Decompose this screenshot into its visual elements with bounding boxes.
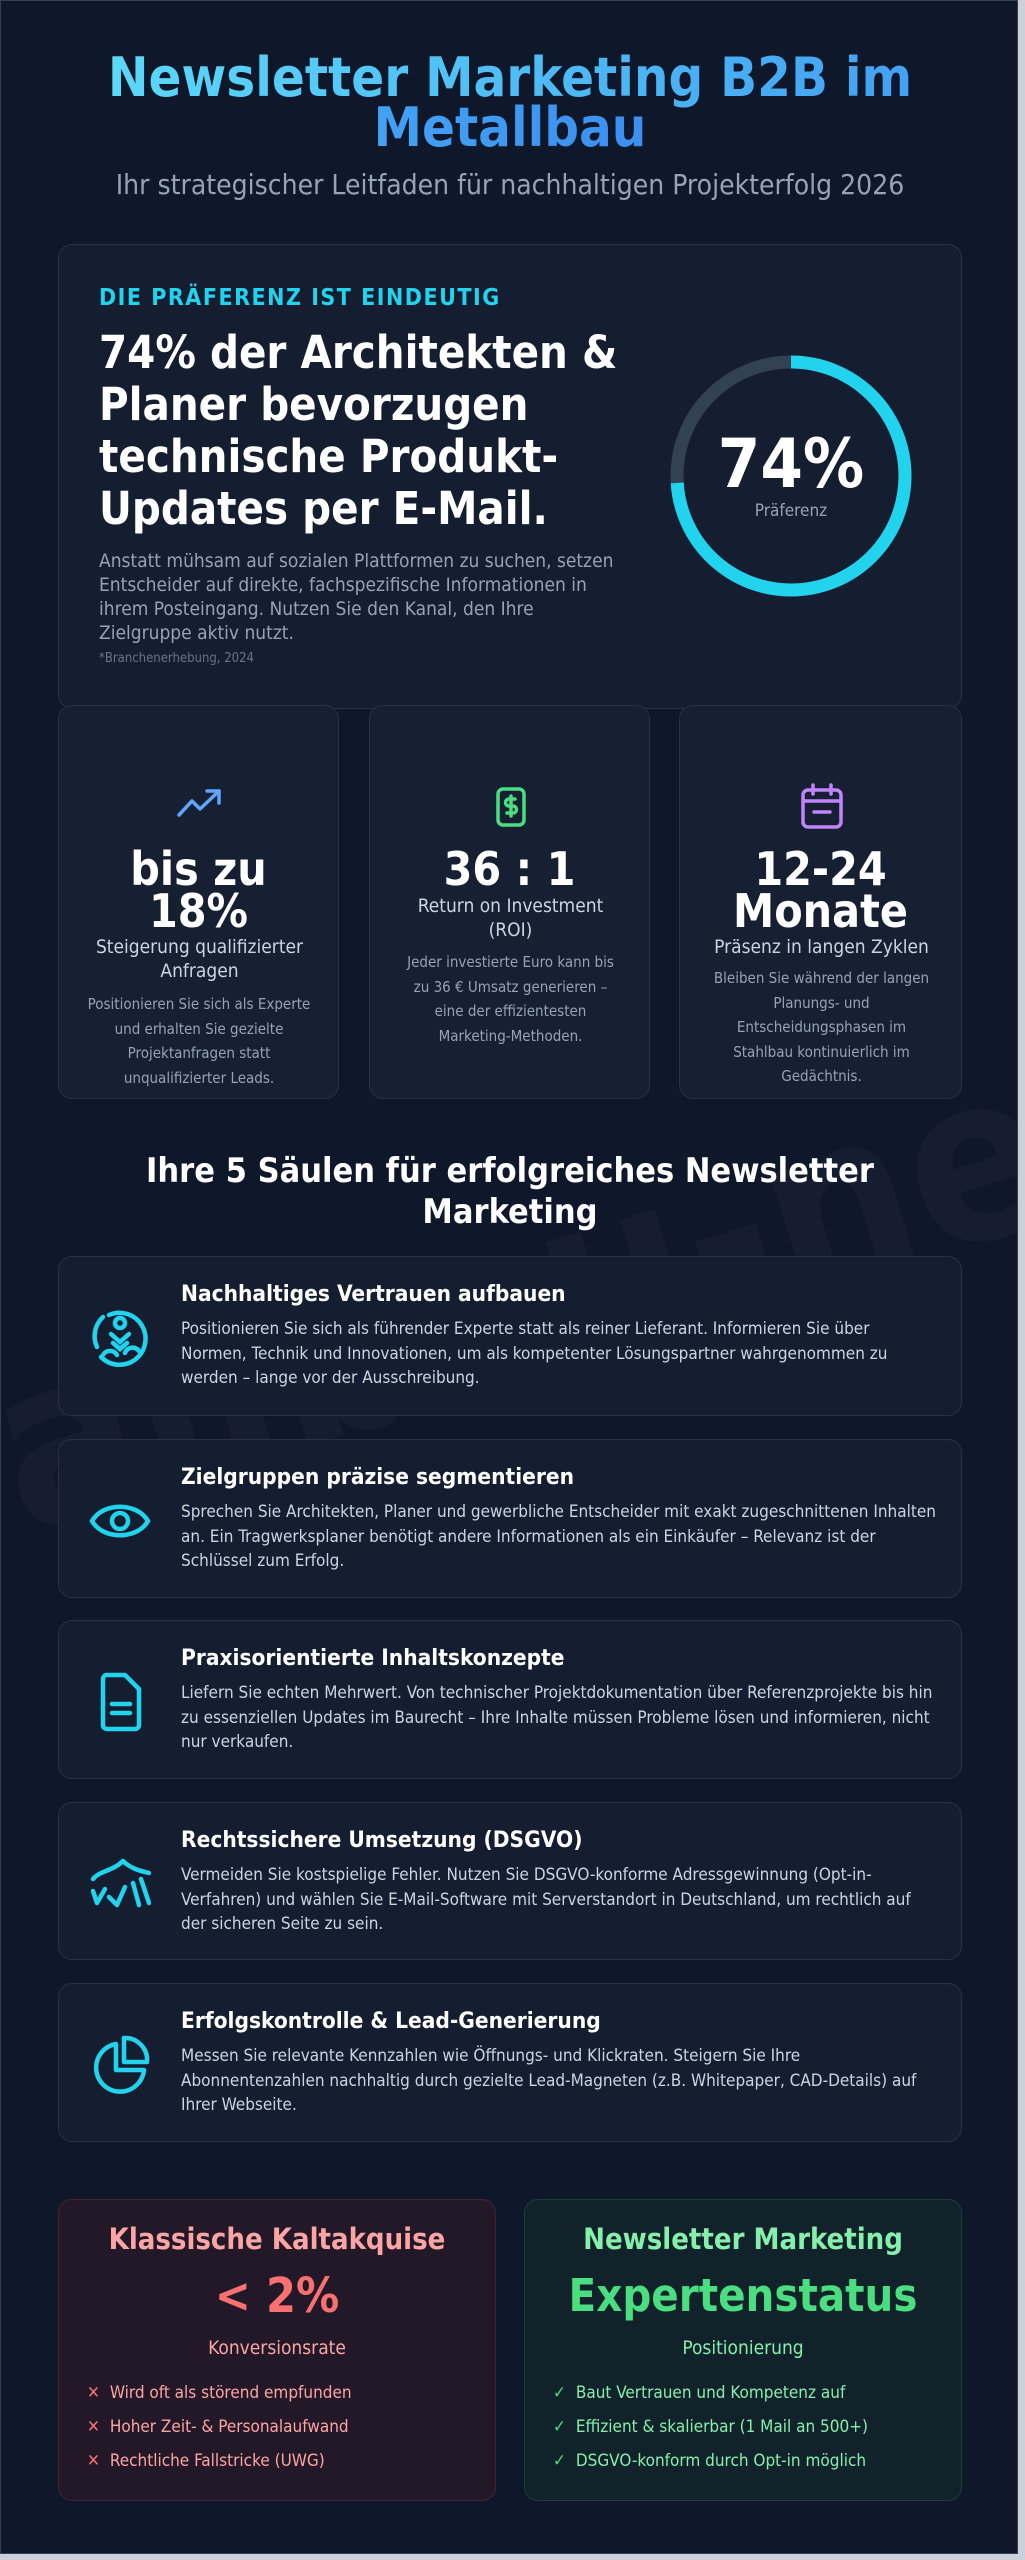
panel: stat ROI: Jeder investierte Euro kann bis zu 36 € Umsatz generieren – eine der effizientesten Marketing-Methoden. (407, 953, 614, 1044)
panel: pillar 1 (58, 1256, 962, 1416)
panel: pillar 2 (58, 1439, 962, 1598)
panel: stat 12-24 Monate: Bleiben Sie während der langen Planungs- und Entscheidungsphasen im Stahlbau kontinuierlich im Gedächtnis. (714, 969, 929, 1085)
panel: pillar 1: Positionieren Sie sich als führender Experte statt als reiner Lieferant. Informieren Sie über Normen, Technik und Innovationen, um als kompetenter Lösungspartner wahrgenommen zu werden – lange vor der Ausschreibung. (181, 1319, 888, 1388)
panel: stat 18%: Steigerung qualifizierter Anfragen (96, 936, 303, 982)
list: drawbacks: ✕ Wird oft als störend empfunden (87, 2383, 352, 2403)
panel: pillar 4: Rechtssichere Umsetzung (DSGVO) (181, 1827, 582, 1853)
subtitle: Ihr strategischer Leitfaden für nachhaltigen Projekterfolg 2026 (116, 168, 904, 201)
panel: pillar 4: Vermeiden Sie kostspielige Fehler. Nutzen Sie DSGVO-konforme Adressgewinnung (Opt-in-Verfahren) und wählen Sie E-Mail-Software mit Serverstandort in Deutschland, um rechtlich auf der sicheren Seite zu sein. (181, 1865, 911, 1934)
panel: stat ROI (369, 705, 650, 1099)
panel: pillar 3: Liefern Sie echten Mehrwert. Von technischer Projektdokumentation über Referenzprojekte bis hin zu essenziellen Updates im Baurecht – Ihre Inhalte müssen Probleme lösen und informieren, nicht nur verkaufen. (181, 1683, 932, 1752)
panel: stat 12-24 Monate: Präsenz in langen Zyklen (714, 936, 929, 958)
icon: pie chart (94, 2036, 150, 2094)
list: benefits (553, 2383, 868, 2471)
panel: pillar 5: Erfolgskontrolle & Lead-Generierung (181, 2008, 601, 2034)
panel: pillar 2: Sprechen Sie Architekten, Planer und gewerbliche Entscheider mit exakt zugeschnittenen Inhalten an. Ein Tragwerksplaner benötigt andere Informationen als ein Einkäufer – Relevanz ist der Schlüssel zum Erfolg. (181, 1502, 936, 1571)
panel: comparison newsletter: Positionierung (682, 2337, 804, 2359)
section heading: Ihre 5 Säulen für erfolgreiches Newsletter (146, 1151, 874, 1191)
panel: pillar 4 (58, 1802, 962, 1960)
icon: calendar (801, 783, 843, 829)
panel: stat 12-24 Monate (679, 705, 962, 1099)
panel: stat 18% (58, 705, 339, 1099)
panel: comparison newsletter (524, 2199, 962, 2501)
footnote: *Branchenerhebung, 2024 (99, 651, 254, 666)
panel: comparison cold acquisition: Konversionsrate (208, 2337, 346, 2359)
panel: pillar 5: Messen Sie relevante Kennzahlen wie Öffnungs- und Klickraten. Steigern Sie Ihre Abonnentenzahlen nachhaltig durch gezielte Lead-Magneten (z.B. Whitepaper, CAD-Details) auf Ihrer Webseite. (181, 2046, 916, 2115)
number: 18% (149, 884, 248, 938)
title (108, 46, 912, 159)
title: Newsletter Marketing B2B im (108, 46, 912, 109)
list: drawbacks (87, 2383, 352, 2471)
donut chart 74%: Präferenz (755, 501, 827, 521)
panel: comparison cold acquisition (58, 2199, 496, 2501)
panel: stat ROI: Return on Investment (ROI) (418, 895, 603, 941)
list: drawbacks: ✕ Hoher Zeit- & Personalaufwand (87, 2417, 349, 2437)
panel: comparison cold acquisition: Klassische Kaltakquise (109, 2222, 445, 2256)
panel: comparison newsletter: Newsletter Marketing (583, 2222, 903, 2256)
panel: comparison cold acquisition: < 2% (215, 2268, 339, 2324)
donut chart 74% (670, 356, 912, 596)
donut chart 74%: 74% (718, 425, 864, 504)
panel: pillar 2: Zielgruppen präzise segmentieren (181, 1464, 574, 1490)
panel: stat 18%: Positionieren Sie sich als Experte und erhalten Sie gezielte Projektanfragen statt unqualifizierter Leads. (88, 995, 310, 1086)
list: benefits: ✓ DSGVO-konform durch Opt-in möglich (553, 2451, 866, 2471)
number (733, 842, 908, 938)
panel: pillar 3 (58, 1620, 962, 1779)
list: drawbacks: ✕ Rechtliche Fallstricke (UWG) (87, 2451, 325, 2471)
icon: trust (92, 1310, 148, 1367)
icon: shield (90, 1858, 151, 1908)
number: Monate (733, 884, 908, 938)
number (130, 842, 267, 938)
panel: pillar 3: Praxisorientierte Inhaltskonzepte (181, 1645, 565, 1671)
section heading (146, 1151, 874, 1232)
number: 12-24 (754, 842, 887, 896)
icon: eye (90, 1504, 150, 1538)
panel: hero statistic (58, 244, 962, 709)
list: benefits: ✓ Effizient & skalierbar (1 Mail an 500+) (553, 2417, 868, 2437)
section heading: Marketing (422, 1192, 598, 1232)
title: Metallbau (374, 96, 646, 159)
panel: pillar 5 (58, 1983, 962, 2142)
paragraph: Anstatt mühsam auf sozialen Plattformen zu suchen, setzen Entscheider auf direkte, fachspezifische Informationen in ihrem Posteingang. Nutzen Sie den Kanal, den Ihre Zielgruppe aktiv nutzt. (99, 550, 613, 644)
icon: trend up (177, 789, 221, 817)
icon: dollar phone (496, 787, 526, 827)
headline: 74% der Architekten & Planer bevorzugen technische Produkt-Updates per E-Mail. (99, 326, 617, 535)
panel: comparison newsletter: Expertenstatus (569, 2269, 917, 2322)
list: benefits: ✓ Baut Vertrauen und Kompetenz auf (553, 2383, 845, 2403)
number: bis zu (130, 842, 267, 896)
panel: pillar 1: Nachhaltiges Vertrauen aufbauen (181, 1281, 566, 1307)
icon: document (100, 1672, 142, 1732)
number: 36 : 1 (444, 842, 575, 896)
kicker: DIE PRÄFERENZ IST EINDEUTIG (99, 285, 501, 311)
